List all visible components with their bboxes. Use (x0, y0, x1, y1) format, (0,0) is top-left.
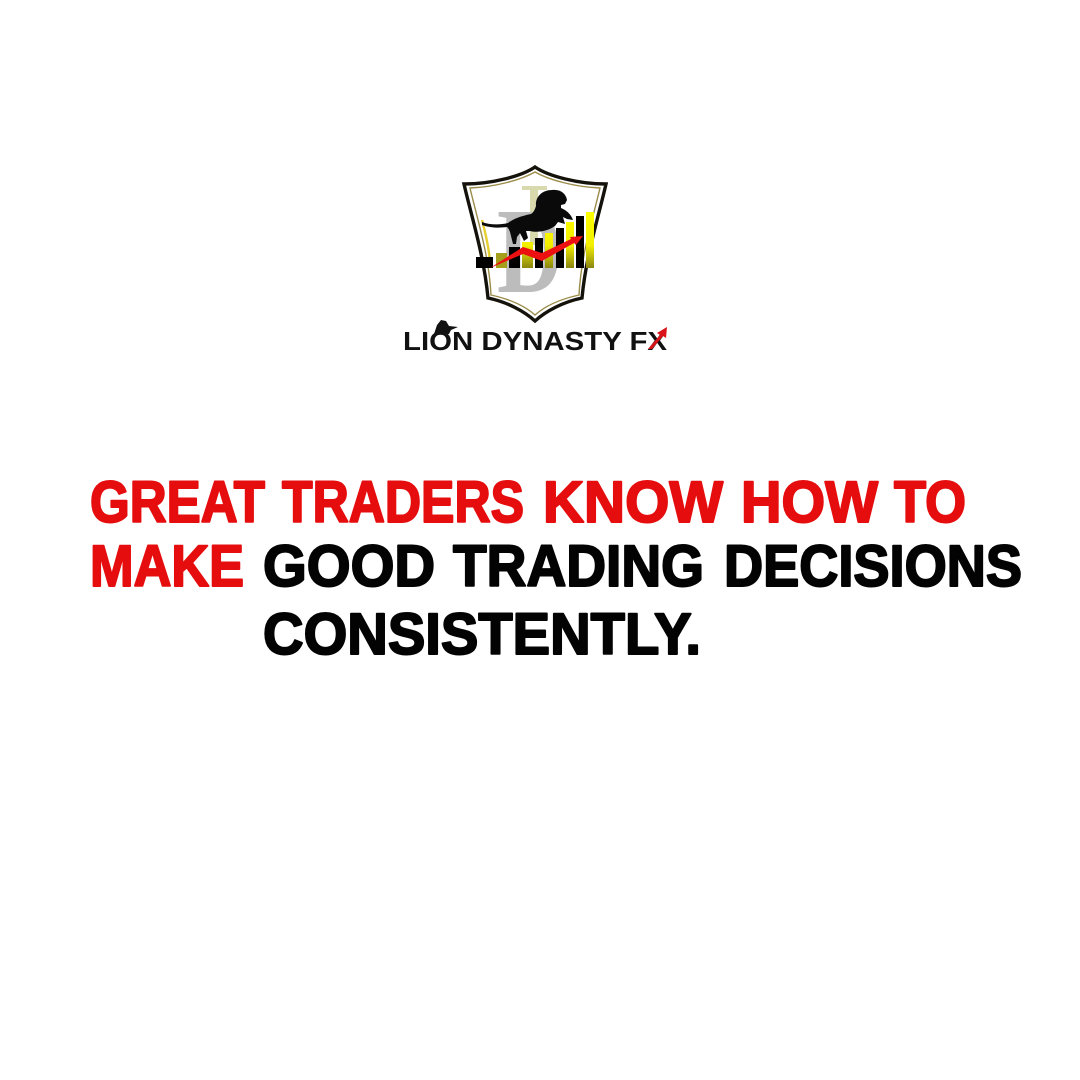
monogram letter L (522, 186, 547, 245)
icon: small lion on wordmark (434, 320, 458, 334)
headline line 2: MAKE (90, 534, 244, 599)
headline (90, 470, 1022, 667)
headline line 1: TRADERS (282, 470, 524, 535)
headline line 1: KNOW (543, 470, 723, 535)
icon: small red arrow on wordmark (648, 327, 667, 349)
headline line 2 (90, 534, 1022, 599)
monogram letter D: D (497, 184, 563, 319)
headline line 1: HOW (741, 470, 878, 535)
icon: shield (464, 167, 606, 321)
headline line 1: TO (894, 470, 966, 535)
headline line 2: TRADING (453, 534, 704, 599)
icon: rising bar chart (476, 212, 594, 268)
headline line 1: GREAT (90, 470, 265, 535)
headline line 2: DECISIONS (724, 534, 1022, 599)
logo wordmark: LION DYNASTY FX (403, 326, 668, 356)
logo: Lion Dynasty FX (403, 167, 668, 356)
headline line 1 (90, 470, 966, 535)
icon: leaping lion (482, 190, 573, 244)
headline line 2: GOOD (263, 534, 435, 599)
icon: red trend arrow (490, 236, 583, 268)
headline line 3: CONSISTENTLY. (263, 602, 701, 667)
